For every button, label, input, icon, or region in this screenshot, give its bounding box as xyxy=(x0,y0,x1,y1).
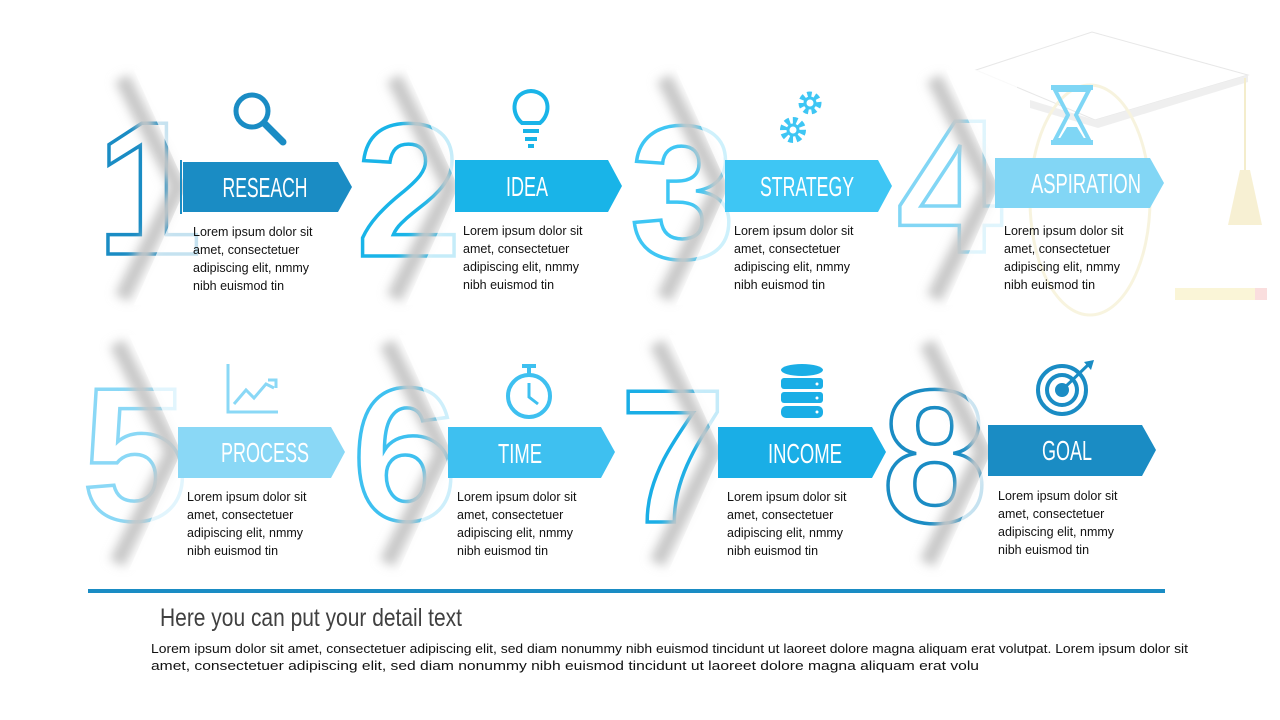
banner: GOAL: GOAL xyxy=(1042,435,1092,466)
icon: target xyxy=(1038,360,1094,414)
banner: IDEA xyxy=(455,160,622,212)
banner: STRATEGY xyxy=(725,160,892,212)
text block: Lorem ipsum dolor sit xyxy=(727,490,847,504)
text block: adipiscing elit, nmmy xyxy=(193,261,310,275)
watermark: graduation cap xyxy=(976,32,1267,315)
chevron shadows xyxy=(117,70,1017,570)
panel: income xyxy=(718,364,886,558)
text block: amet, consectetuer xyxy=(734,242,840,256)
text block: amet, consectetuer xyxy=(463,242,569,256)
numbers: 5 xyxy=(82,349,188,561)
numbers: 3 xyxy=(630,87,736,299)
banner: ASPIRATION: ASPIRATION xyxy=(1031,168,1141,199)
icon: light bulb xyxy=(515,91,547,146)
panel: goal xyxy=(988,360,1156,557)
text block: nibh euismod tin xyxy=(463,278,554,292)
banner: GOAL xyxy=(988,425,1156,476)
text block: adipiscing elit, nmmy xyxy=(1004,260,1121,274)
text block: amet, consectetuer xyxy=(457,508,563,522)
text block: Lorem ipsum dolor sit xyxy=(457,490,577,504)
panel: idea xyxy=(455,91,622,292)
panel: time xyxy=(448,366,615,558)
text block: amet, consectetuer xyxy=(187,508,293,522)
banner: RESEACH xyxy=(181,160,352,214)
text block: Lorem ipsum dolor sit xyxy=(193,225,313,239)
banner: IDEA: IDEA xyxy=(506,171,548,202)
text block: Lorem ipsum dolor sit xyxy=(734,224,854,238)
text block: adipiscing elit, nmmy xyxy=(998,525,1115,539)
text block: adipiscing elit, nmmy xyxy=(734,260,851,274)
icon: hourglass xyxy=(1051,85,1093,145)
text block: Lorem ipsum dolor sit xyxy=(998,489,1118,503)
numbers: 1 xyxy=(96,83,202,295)
banner: INCOME: INCOME xyxy=(768,438,842,469)
text block: nibh euismod tin xyxy=(734,278,825,292)
text block: adipiscing elit, nmmy xyxy=(457,526,574,540)
text block: Lorem ipsum dolor sit xyxy=(463,224,583,238)
numbers xyxy=(82,81,1003,563)
paragraph: amet, consectetuer adipiscing elit, sed diam nonummy nibh euismod tincidunt ut laoreet dolore magna aliquam erat volu xyxy=(151,659,979,673)
icon: chart xyxy=(228,364,278,412)
text block: adipiscing elit, nmmy xyxy=(187,526,304,540)
numbers: 8 xyxy=(882,351,988,563)
text block: amet, consectetuer xyxy=(998,507,1104,521)
numbers: 6 xyxy=(352,349,458,561)
text block: amet, consectetuer xyxy=(193,243,299,257)
text block: amet, consectetuer xyxy=(1004,242,1110,256)
panel: research xyxy=(181,95,352,293)
icon: database xyxy=(781,364,823,418)
paragraph: Lorem ipsum dolor sit amet, consectetuer adipiscing elit, sed diam nonummy nibh euismod tincidunt ut laoreet dolore magna aliquam erat volutpat. Lorem ipsum dolor sit xyxy=(151,642,1189,656)
banner: INCOME xyxy=(718,427,886,478)
icon: magnifier xyxy=(236,95,283,142)
text block: adipiscing elit, nmmy xyxy=(727,526,844,540)
banner: PROCESS: PROCESS xyxy=(221,437,309,468)
banner: STRATEGY: STRATEGY xyxy=(760,171,854,202)
banner: RESEACH: RESEACH xyxy=(222,172,308,203)
banner: TIME: TIME xyxy=(498,438,542,469)
text block: nibh euismod tin xyxy=(998,543,1089,557)
text block: adipiscing elit, nmmy xyxy=(463,260,580,274)
text block: nibh euismod tin xyxy=(187,544,278,558)
text block: nibh euismod tin xyxy=(193,279,284,293)
banner: TIME xyxy=(448,427,615,478)
text block: Lorem ipsum dolor sit xyxy=(1004,224,1124,238)
banner: ASPIRATION xyxy=(995,158,1164,208)
panel: strategy xyxy=(725,95,892,292)
numbers: 2 xyxy=(356,85,462,297)
text block: nibh euismod tin xyxy=(727,544,818,558)
panel: process xyxy=(178,364,345,558)
text block: nibh euismod tin xyxy=(457,544,548,558)
text block: Lorem ipsum dolor sit xyxy=(187,490,307,504)
panel: aspiration xyxy=(995,85,1164,292)
numbers: 4 xyxy=(897,81,1003,293)
numbers: 7 xyxy=(620,351,726,563)
heading: detail text: Here you can put your detail text xyxy=(160,604,462,632)
icon: stopwatch xyxy=(508,366,550,417)
banner: PROCESS xyxy=(178,427,345,478)
text block: amet, consectetuer xyxy=(727,508,833,522)
icon: gears xyxy=(784,95,818,139)
text block: nibh euismod tin xyxy=(1004,278,1095,292)
